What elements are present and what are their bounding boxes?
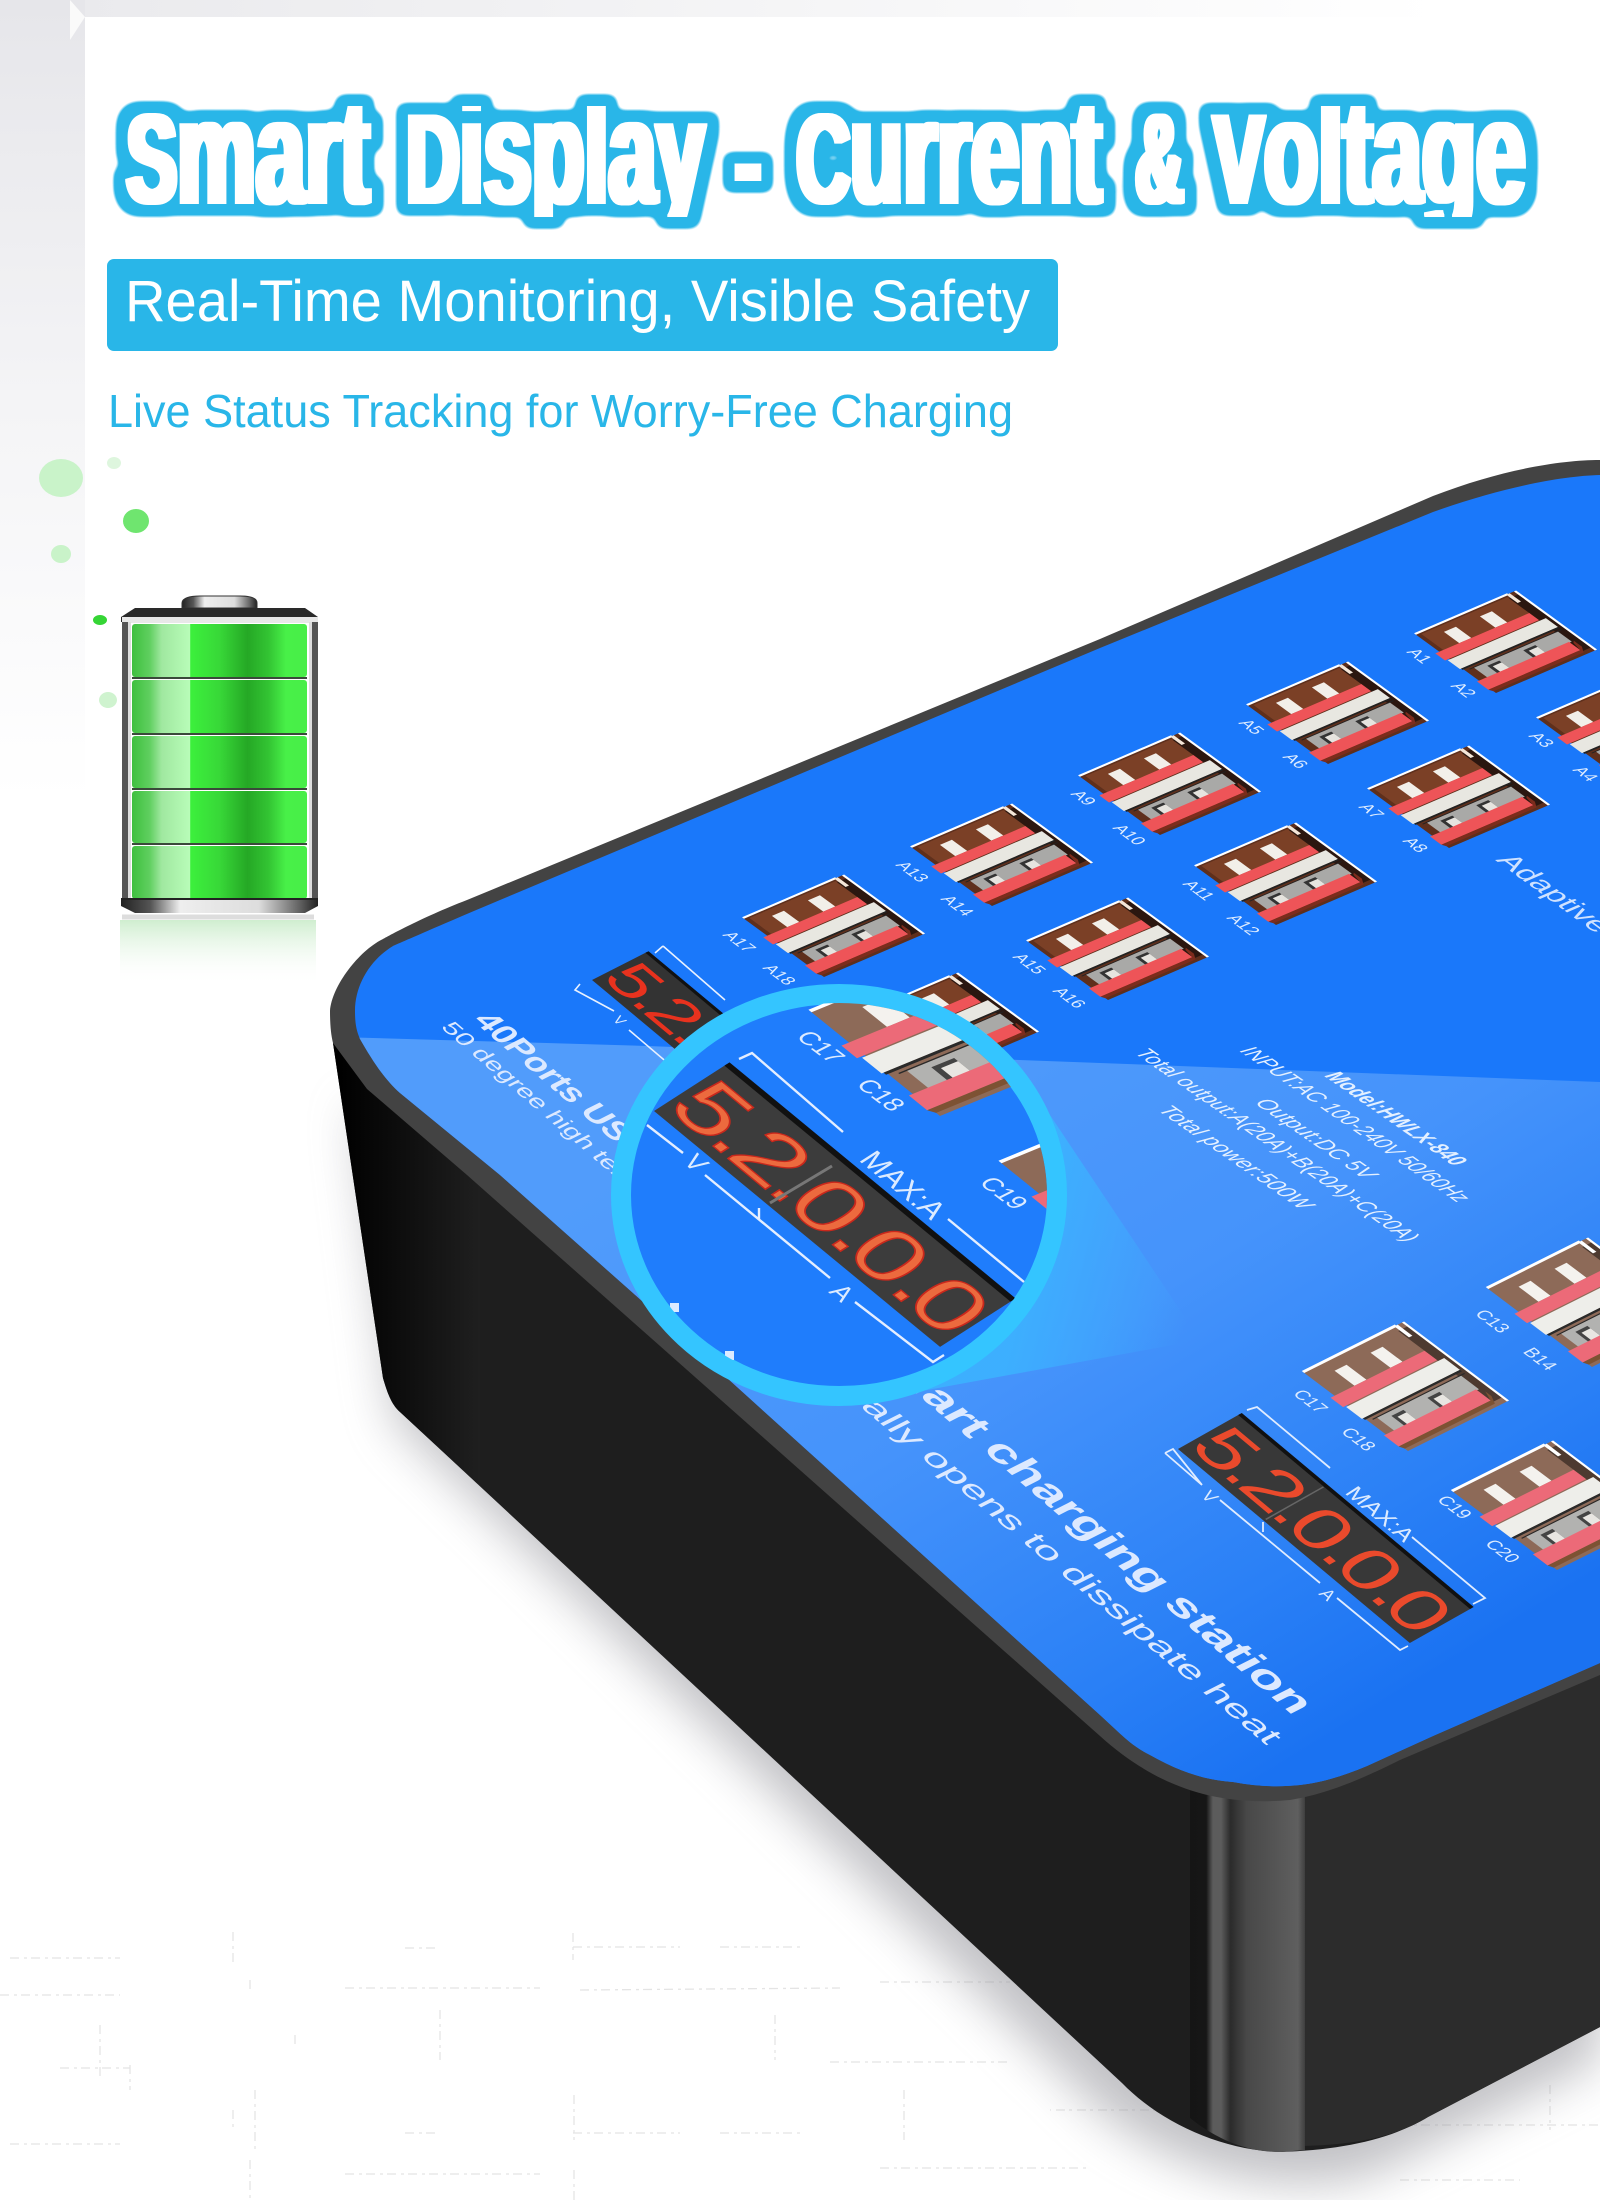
port pair A15 A16 <box>1008 898 1208 1010</box>
port pair A5 A6 <box>1234 662 1428 771</box>
LED voltage and current display lower right: MAX:A <box>1340 1482 1421 1546</box>
LED voltage and current display lower right: 5.2.0.0.0 <box>1175 1415 1471 1645</box>
title: Smart Display - Current & Voltage: Smart <box>126 68 370 235</box>
spec text block: INPUT:AC 100-240V 50/60Hz <box>1234 1043 1476 1205</box>
port pair C17 C18 <box>1288 1322 1508 1454</box>
tagline: Live Status Tracking for Worry-Free Charging: Live Status Tracking for Worry-Free Charging <box>108 385 1013 437</box>
magnified port labels: C18 <box>850 1075 911 1115</box>
port pair C13 B14 <box>1470 1238 1600 1373</box>
port pair A3 A4: A3 <box>1524 730 1559 750</box>
spec text block: Total output:A(20A)+B(20A)+C(20A) <box>1129 1045 1425 1245</box>
port pair A7 A8: A7 <box>1354 801 1389 821</box>
port pair A17 A18: A18 <box>758 962 800 987</box>
partial LED display top left: V <box>609 1013 631 1028</box>
port pair A11 A12: A12 <box>1222 912 1264 937</box>
magnifier lens <box>611 984 1067 1406</box>
port pair C17 C18: C18 <box>1336 1425 1381 1454</box>
port pair A5 A6: A5 <box>1234 717 1269 737</box>
magnified port labels <box>800 1032 1026 1208</box>
icon: charged battery <box>120 596 318 985</box>
magnified USB port C19 <box>998 1144 1047 1209</box>
port pair C19 C20: C20 <box>1480 1537 1525 1566</box>
port pair A15 A16: A15 <box>1008 951 1050 976</box>
product name text on face: 40Ports USB <box>466 1007 661 1163</box>
charger: grey top rim <box>330 460 1600 1801</box>
title: Smart Display - Current & Voltage: Display <box>406 68 705 235</box>
LED voltage and current display lower right: A <box>1315 1585 1341 1604</box>
port pair C19 C20 <box>1432 1441 1600 1572</box>
spec text block: Output:DC 5V <box>1249 1095 1385 1183</box>
product name text on face: smart charging station <box>853 1330 1325 1720</box>
title: Smart Display - Current & Voltage <box>112 93 1539 230</box>
product name text on face: 50 degree high temperature fan <box>436 1018 762 1289</box>
port pair C17 C18: C17 <box>1288 1387 1333 1416</box>
magnified USB port C17 C18 <box>808 1003 1011 1116</box>
port partly behind lens <box>853 973 1038 1077</box>
port pair A1 A2 <box>1402 591 1596 700</box>
port pair A7 A8: A8 <box>1398 835 1433 855</box>
port pair C19 C20: C19 <box>1432 1493 1477 1522</box>
magnified LED display: 5.2.0.0.0 <box>650 1066 1012 1350</box>
USB ports row C with labels <box>1288 1238 1600 1572</box>
charger soft shadow on the surface <box>355 1100 1600 2184</box>
partial LED display top left: 5.2.0.0.0 <box>589 953 844 1147</box>
spec text block: Model:HWLX-840 <box>1319 1068 1473 1169</box>
port pair A15 A16: A16 <box>1048 985 1090 1010</box>
port pair A13 A14 <box>891 804 1092 918</box>
port pair A11 A12: A11 <box>1178 878 1219 903</box>
light beam from magnifier to display <box>900 1100 1200 1395</box>
subtitle banner: Real-Time Monitoring, Visible Safety: Real-Time Monitoring, Visible Safety <box>125 269 1030 334</box>
spec text block: Total power:500W <box>1152 1102 1322 1214</box>
port pair A11 A12 <box>1178 823 1376 937</box>
port pair C13 B14: B14 <box>1518 1345 1562 1373</box>
magnified contents: MAX:A <box>852 1146 953 1225</box>
port pair A9 A10 <box>1066 733 1260 847</box>
product name text on face <box>436 1007 1325 1749</box>
port pair A5 A6: A6 <box>1278 751 1313 771</box>
subtitle banner: Real-Time Monitoring, Visible Safety <box>107 259 1058 351</box>
USB ports row A with labels <box>718 591 1600 1077</box>
magnified port labels: C17 <box>790 1027 851 1067</box>
magnified brackets and labels <box>647 1053 1024 1362</box>
port pair A9 A10: A10 <box>1108 822 1150 847</box>
title: Smart Display - Current & Voltage: Current <box>796 68 1102 235</box>
port pair A17 A18 <box>718 875 924 987</box>
title: Smart Display - Current & Voltage: & <box>1136 88 1184 230</box>
title: Smart Display - Current & Voltage: - <box>735 88 761 234</box>
port pair A17 A18: A17 <box>718 929 760 954</box>
port pair A9 A10: A9 <box>1066 788 1101 808</box>
port pair A3 A4 <box>1524 675 1600 784</box>
magnified contents: A <box>823 1279 862 1307</box>
magnified contents <box>646 1003 1047 1364</box>
magnified port labels: C19 <box>973 1173 1034 1213</box>
port pair C13 B14: C13 <box>1470 1307 1515 1336</box>
port pair A1 A2: A2 <box>1446 680 1481 700</box>
charger: blue top face <box>300 460 1600 1800</box>
magnified contents: V <box>677 1149 716 1177</box>
port pair A7 A8 <box>1354 746 1549 855</box>
icon: green bubbles <box>39 457 149 708</box>
port pair A1 A2: A1 <box>1402 646 1437 666</box>
port pair A13 A14: A13 <box>891 859 933 884</box>
charger: black body <box>333 1043 1600 2152</box>
LED voltage and current display lower right: V <box>1197 1487 1223 1506</box>
port pair A13 A14: A14 <box>936 893 978 918</box>
product name text on face: automatically opens to dissipate heat <box>707 1272 1291 1749</box>
